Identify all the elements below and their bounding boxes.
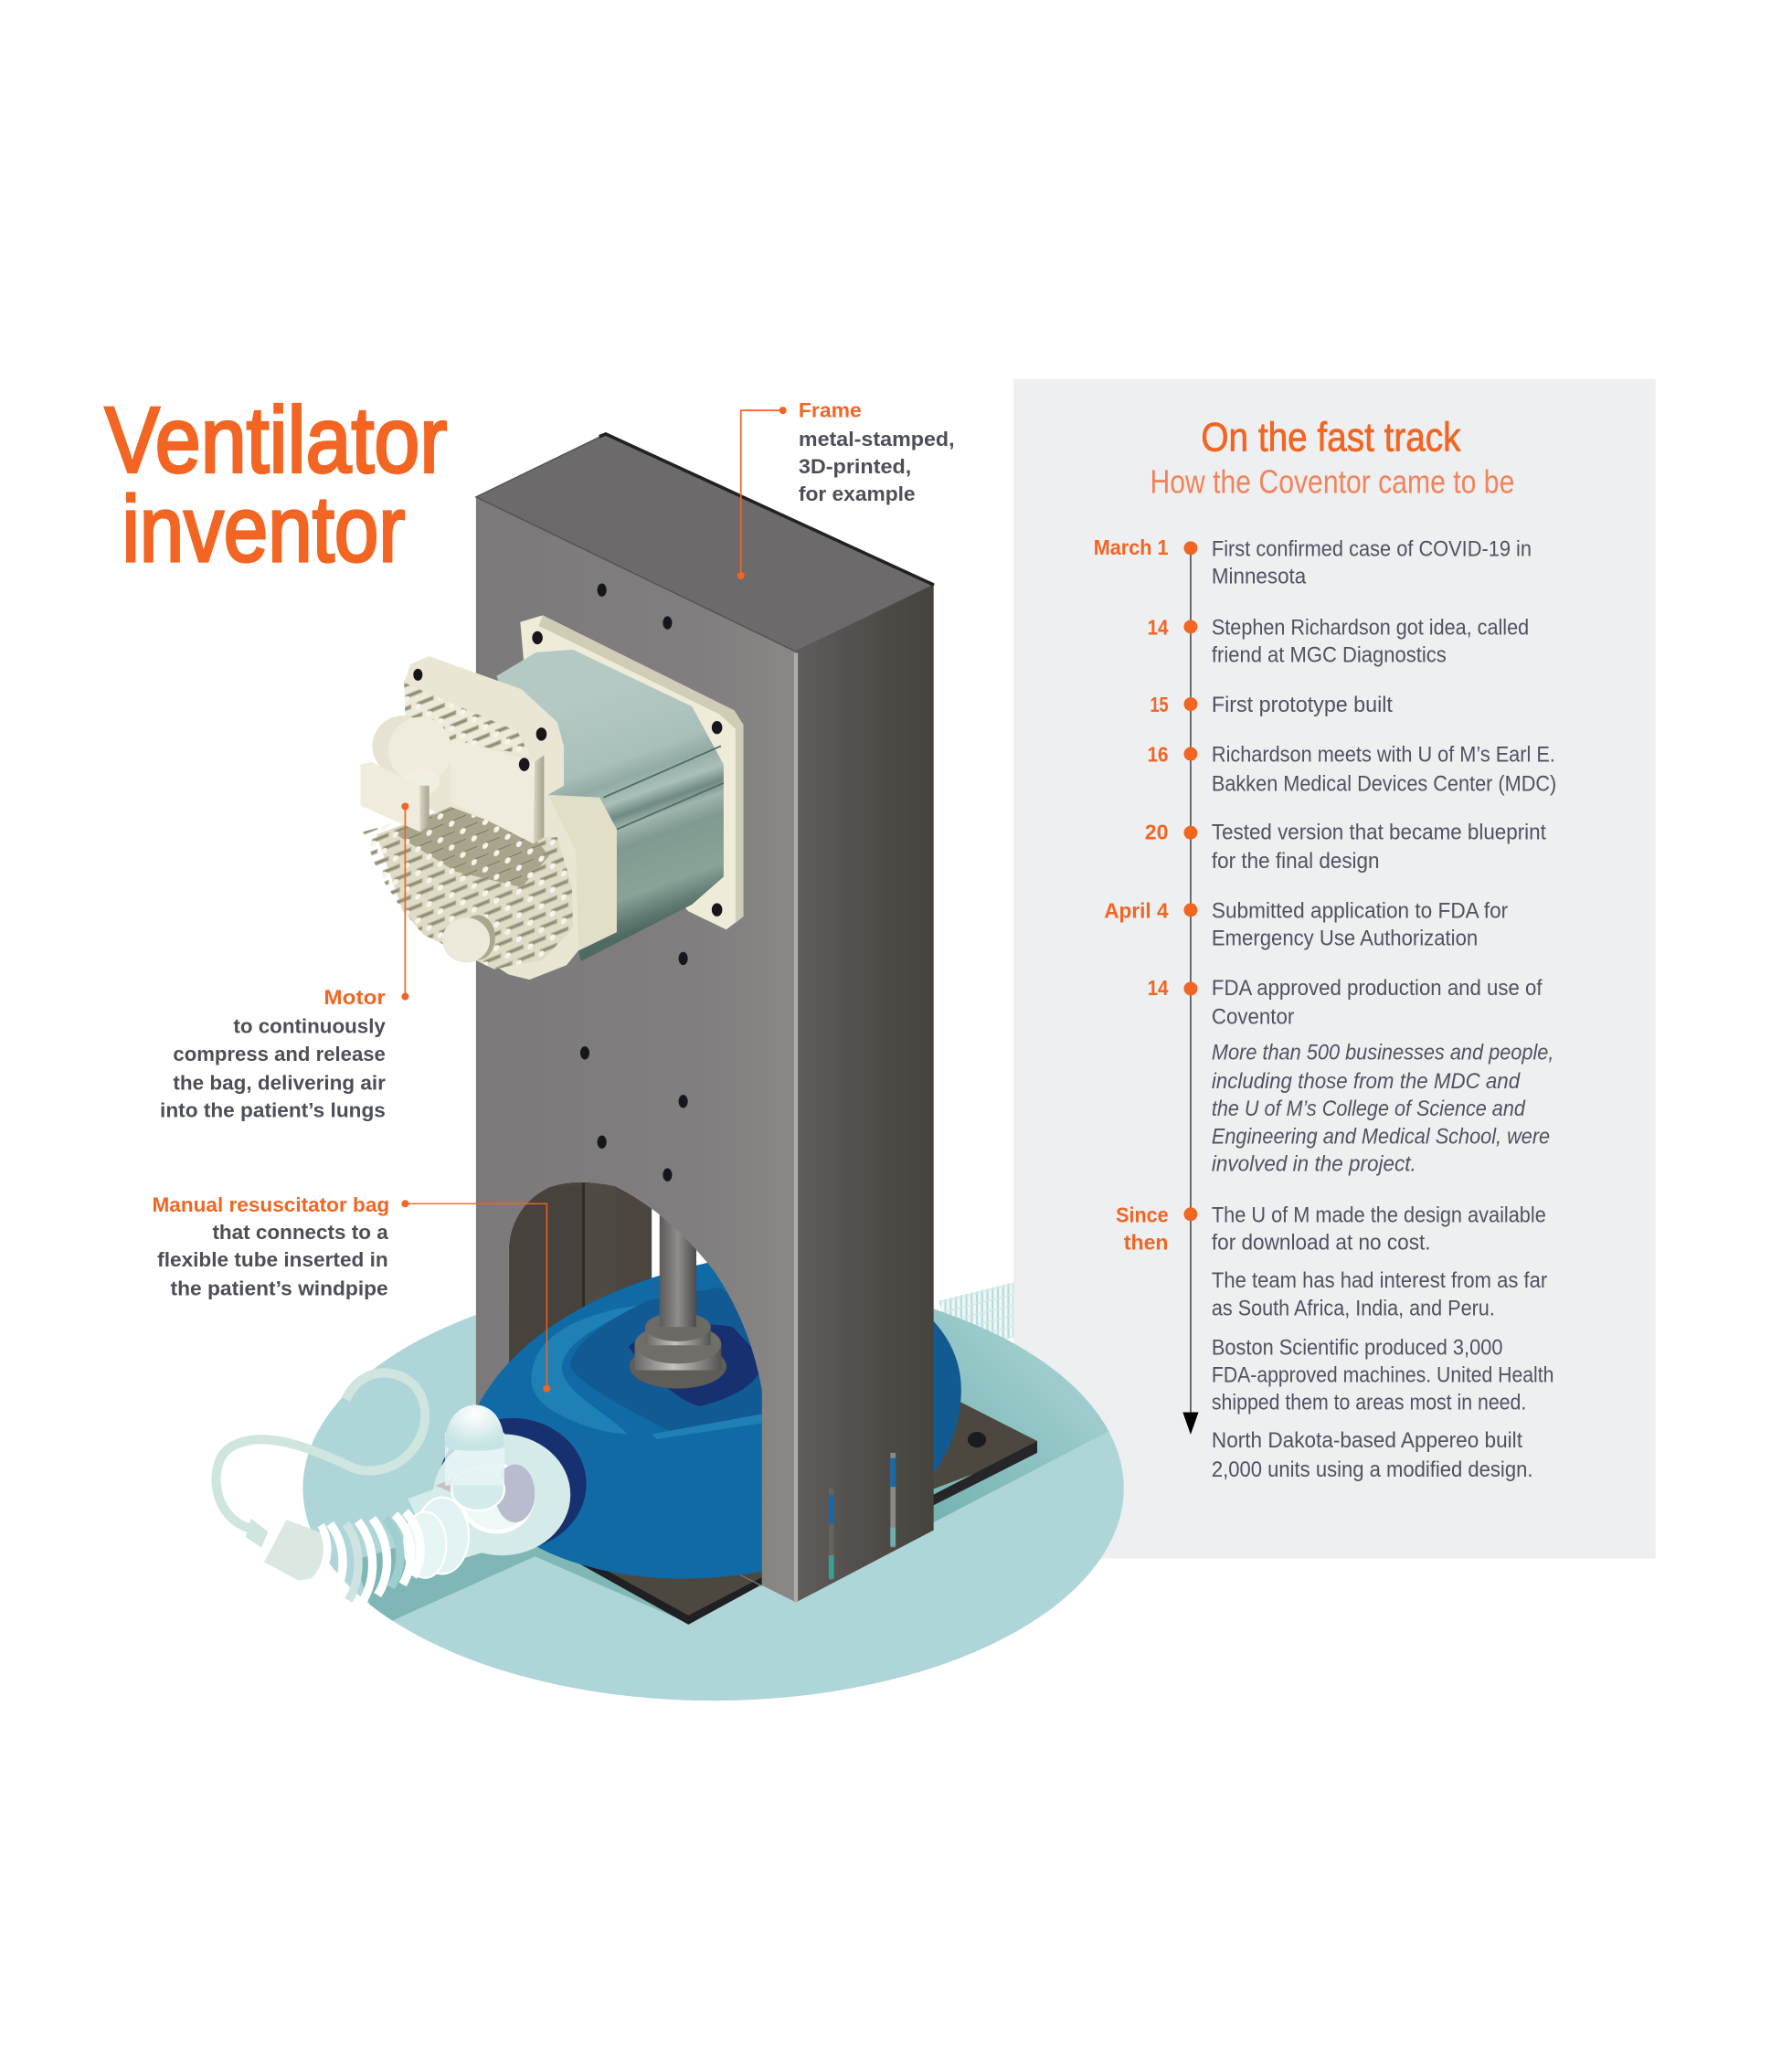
rear mounting flange <box>520 615 744 929</box>
callout: frame: for example <box>799 482 916 505</box>
callout: manual resuscitator bag: flexible tube inserted in <box>157 1248 388 1271</box>
timeline entries: Richardson meets with U of M’s Earl E. <box>1212 744 1555 768</box>
timeline entries: for download at no cost. <box>1212 1232 1431 1256</box>
callout: manual resuscitator bag <box>152 1193 550 1393</box>
title: inventor <box>122 477 405 581</box>
timeline entries: FDA approved production and use of <box>1212 977 1543 1001</box>
frame right face <box>796 585 934 1603</box>
lower boss <box>461 915 495 960</box>
lower fins <box>363 807 573 970</box>
shaft collar <box>630 1298 726 1389</box>
right block <box>451 739 535 843</box>
callout: frame: metal-stamped, <box>799 428 955 450</box>
frame mounting holes <box>580 584 688 1182</box>
patient valve and tube <box>404 1404 587 1578</box>
upper fins <box>404 683 529 756</box>
motor <box>360 615 744 980</box>
callout: motor: the bag, delivering air <box>173 1071 386 1094</box>
panel heading: On the fast track <box>1201 416 1461 461</box>
flange holes <box>532 631 543 644</box>
timeline entries: Boston Scientific produced 3,000 <box>1212 1336 1502 1360</box>
teal floor ellipse with cast shadows <box>303 1304 1124 1701</box>
title: Ventilator <box>105 388 447 493</box>
title <box>105 388 447 581</box>
callout: motor: Motor <box>323 986 386 1009</box>
timeline entries: for the final design <box>1212 850 1380 874</box>
timeline dates: 16 <box>1148 743 1169 767</box>
timeline entries: The team has had interest from as far <box>1212 1269 1547 1293</box>
shaft <box>660 1215 696 1315</box>
base plate <box>531 1401 1037 1625</box>
motor cylinder <box>496 650 724 961</box>
frame front face <box>476 497 796 1603</box>
timeline entries: North Dakota-based Appereo built <box>1212 1429 1522 1453</box>
housing holes <box>413 669 422 681</box>
timeline entries: the U of M’s College of Science and <box>1212 1097 1526 1121</box>
timeline dots <box>1183 541 1197 1221</box>
timeline dates: 20 <box>1145 820 1169 843</box>
timeline dates: 14 <box>1148 616 1169 640</box>
callout: frame: 3D-printed, <box>799 455 911 478</box>
callout: manual resuscitator bag: Manual resuscitator bag <box>152 1193 389 1216</box>
oxygen line loop <box>217 1372 425 1529</box>
timeline axis with arrow <box>1182 548 1199 1435</box>
callout: frame <box>737 398 955 579</box>
timeline dates: then <box>1124 1231 1169 1255</box>
timeline dates: Since <box>1116 1203 1169 1226</box>
frame top edge highlight <box>599 434 934 585</box>
panel heading <box>1150 416 1514 501</box>
timeline entries: Submitted application to FDA for <box>1212 899 1508 923</box>
timeline entries: shipped them to areas most in need. <box>1212 1392 1526 1415</box>
callout: manual resuscitator bag: the patient’s windpipe <box>171 1277 388 1300</box>
frame slots <box>829 1453 896 1580</box>
timeline entries: Stephen Richardson got idea, called <box>1212 617 1529 641</box>
timeline dates: 14 <box>1148 976 1169 1000</box>
callout: manual resuscitator bag: that connects to a <box>212 1221 388 1244</box>
callout: motor: to continuously <box>233 1015 387 1038</box>
timeline dates: April 4 <box>1104 898 1169 922</box>
timeline entries: First confirmed case of COVID-19 in <box>1212 537 1532 561</box>
manual resuscitator bag: back layer <box>476 1259 961 1579</box>
panel heading: How the Coventor came to be <box>1150 464 1514 501</box>
timeline entries: 2,000 units using a modified design. <box>1212 1458 1532 1482</box>
arch interior seen through the frame <box>509 1182 762 1390</box>
callout: motor: compress and release <box>173 1043 386 1065</box>
timeline entries: as South Africa, India, and Peru. <box>1212 1297 1495 1320</box>
timeline entries: Emergency Use Authorization <box>1212 927 1478 951</box>
callout: motor <box>160 802 408 1122</box>
timeline entries: Minnesota <box>1212 566 1307 589</box>
panel: timeline background <box>1013 379 1656 1558</box>
housing side facet <box>548 795 617 950</box>
callout: motor: into the patient’s lungs <box>160 1099 386 1122</box>
mesh tube behind the frame <box>938 1282 1013 1353</box>
timeline entries: Engineering and Medical School, were <box>1212 1125 1550 1149</box>
timeline entries: More than 500 businesses and people, <box>1212 1041 1553 1065</box>
left block <box>360 762 420 832</box>
front housing <box>396 656 617 980</box>
timeline entries: involved in the project. <box>1212 1152 1416 1176</box>
corrugated tube <box>330 1512 420 1600</box>
timeline entries: The U of M made the design available <box>1212 1203 1546 1227</box>
cylinder grooves <box>603 746 724 831</box>
timeline entries: Bakken Medical Devices Center (MDC) <box>1212 772 1556 796</box>
timeline entries: including those from the MDC and <box>1212 1070 1521 1094</box>
timeline entries: FDA-approved machines. United Health <box>1212 1363 1553 1387</box>
frame top face <box>476 434 934 652</box>
timeline entries <box>1212 537 1556 1482</box>
manual resuscitator bag: front layer <box>478 1263 762 1579</box>
lower fin base <box>376 807 573 970</box>
round boss <box>372 715 433 777</box>
timeline entries: Coventor <box>1212 1006 1294 1030</box>
timeline dates: March 1 <box>1094 535 1169 559</box>
timeline dates: 15 <box>1150 693 1169 716</box>
timeline dates <box>1094 535 1169 1255</box>
callout: frame: Frame <box>799 398 862 421</box>
timeline entries: First prototype built <box>1212 694 1393 717</box>
timeline entries: friend at MGC Diagnostics <box>1212 644 1447 668</box>
tube end connector <box>246 1519 329 1591</box>
timeline entries: Tested version that became blueprint <box>1212 821 1546 844</box>
fin shadow <box>396 807 549 887</box>
frame corner highlight <box>795 653 798 1603</box>
